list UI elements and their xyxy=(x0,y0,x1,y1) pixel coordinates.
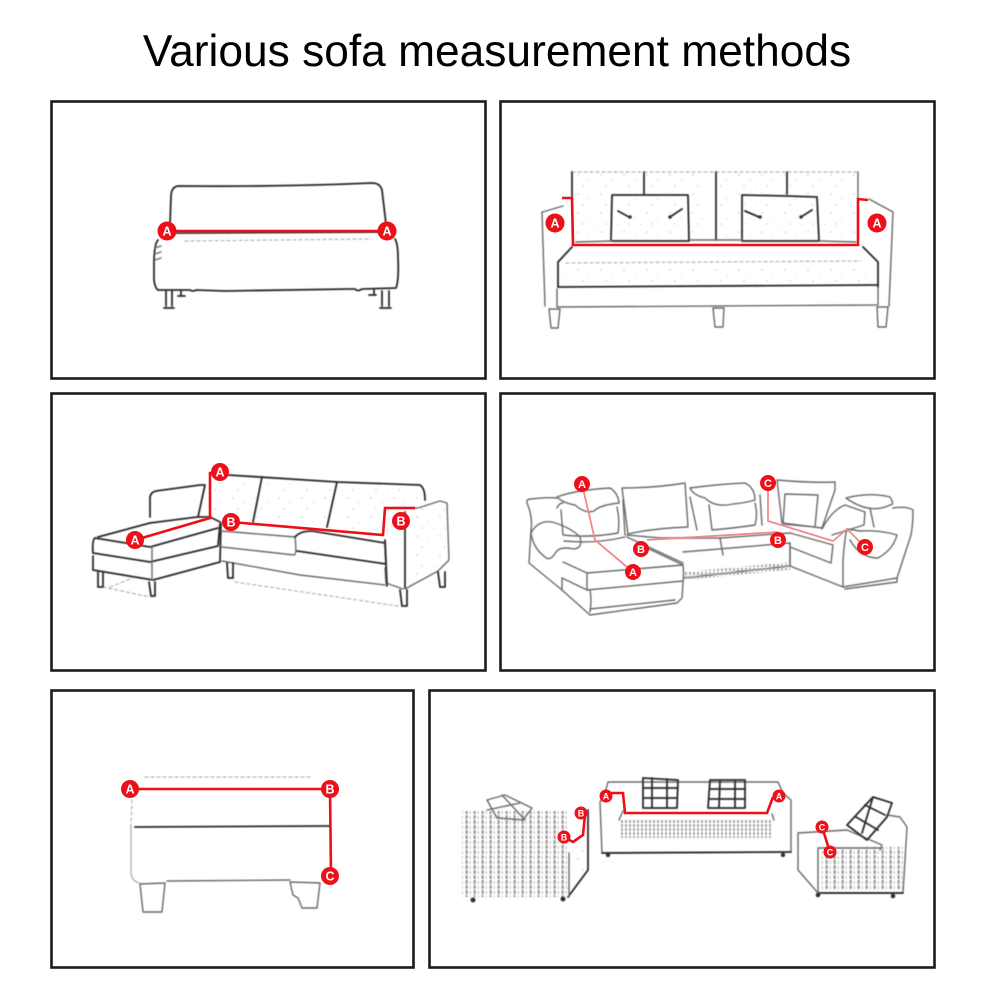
measurement lines A, B and C: C xyxy=(325,870,335,884)
measurement lines: right armchair xyxy=(816,820,836,858)
measurement lines: right armchair: C xyxy=(827,848,834,858)
measurement lines A and B: B xyxy=(226,516,236,530)
measurement lines A and B: A xyxy=(215,466,225,480)
sofa drawing: chaise sectional xyxy=(93,475,449,606)
measurement lines A, B and C: C xyxy=(764,478,772,490)
sofa drawing: centre sofa xyxy=(600,778,791,857)
panel: single section side view xyxy=(52,690,414,968)
panel: U-shaped sofa xyxy=(500,394,934,670)
measurement line A-A xyxy=(546,198,886,245)
measurement lines A, B and C: B xyxy=(325,782,335,796)
measurement lines A, B and C xyxy=(121,780,339,885)
measurement lines A, B and C: A xyxy=(629,567,637,579)
measurement lines A and B xyxy=(126,463,415,549)
panel: sofa with back cushions xyxy=(500,102,934,378)
sofa drawing: front view with pillows xyxy=(542,172,893,328)
sofa drawing: two-seat sofa xyxy=(154,183,398,308)
panel: L-shaped sofa xyxy=(52,394,486,670)
measurement lines: left armchair: B xyxy=(578,808,585,818)
measurement line A-A: A xyxy=(550,216,560,230)
measurement lines: centre sofa xyxy=(600,790,786,813)
panel: three-piece sofa set xyxy=(430,690,934,968)
measurement lines: right armchair: C xyxy=(819,822,826,832)
measurement line A-A: A xyxy=(382,224,392,238)
measurement lines: centre sofa: A xyxy=(603,792,610,802)
measurement lines A, B and C: B xyxy=(774,535,782,547)
title: Various sofa measurement methods xyxy=(143,27,851,76)
measurement lines A, B and C: A xyxy=(125,782,135,796)
measurement line A-A xyxy=(158,222,396,240)
measurement lines A and B: B xyxy=(396,514,406,528)
measurement lines: centre sofa: A xyxy=(776,792,783,802)
measurement lines: left armchair xyxy=(558,806,588,844)
sofa drawing: right armchair xyxy=(798,797,907,898)
sofa drawing: U-shaped sectional xyxy=(527,480,913,615)
sofa drawing: left armchair xyxy=(462,795,588,902)
measurement lines A, B and C xyxy=(574,475,873,580)
sofa drawing: side section with legs xyxy=(131,777,330,912)
measurement lines: left armchair: B xyxy=(561,832,568,842)
measurement line A-A: A xyxy=(162,224,172,238)
measurement lines A, B and C: C xyxy=(861,542,869,554)
measurement lines A and B: A xyxy=(130,534,140,548)
measurement line A-A: A xyxy=(872,216,882,230)
measurement lines A, B and C: B xyxy=(637,544,645,556)
measurement lines A, B and C: A xyxy=(578,479,586,491)
panel: straight sofa front view xyxy=(52,102,486,378)
